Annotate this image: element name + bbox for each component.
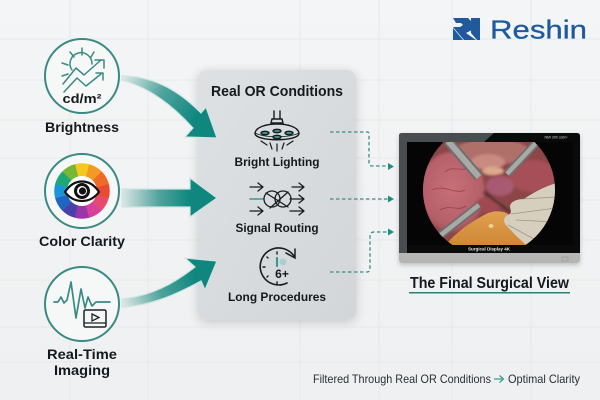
icon: real-time imaging	[45, 267, 119, 341]
display badge: NMI 300 cd/m²	[545, 136, 568, 140]
heading: The Final Surgical View: The Final Surgical View	[410, 275, 569, 292]
label: Bright Lighting: Bright Lighting	[234, 155, 320, 169]
logo: Reshin	[453, 14, 587, 44]
icon: clock 6+	[260, 248, 295, 285]
label: Brightness: Brightness	[45, 119, 119, 135]
surgical image	[423, 142, 555, 245]
arrow: color clarity to panel	[122, 178, 217, 217]
label: Color Clarity: Color Clarity	[39, 233, 125, 249]
arrow: dashed from signal routing to display	[330, 196, 394, 202]
icon: clock 6+: 6+	[275, 267, 289, 281]
label: Signal Routing: Signal Routing	[236, 221, 318, 235]
label: Real-Time Imaging	[47, 346, 117, 378]
icon: brightness	[45, 39, 119, 113]
label: Real-Time Imaging: Imaging	[54, 362, 110, 378]
logo wordmark: Reshin	[490, 14, 587, 44]
footer caption: Optimal Clarity	[508, 372, 580, 386]
icon: signal routing	[250, 183, 304, 215]
icon: surgical lamp	[255, 111, 299, 151]
arrow: brightness to panel	[122, 76, 217, 138]
surgical display monitor	[399, 120, 580, 263]
icon: color clarity eye wheel	[45, 154, 119, 228]
footer caption: Filtered Through Real OR Conditions	[313, 372, 491, 386]
arrow: real-time imaging to panel	[122, 258, 217, 307]
label: Long Procedures: Long Procedures	[228, 290, 326, 304]
panel heading: Real OR Conditions	[211, 83, 343, 100]
arrow: dashed from bright lighting to display	[330, 132, 394, 170]
icon: Reshin mark	[453, 18, 480, 40]
arrow: dashed from long procedures to display	[330, 228, 394, 272]
label: Real-Time Imaging: Real-Time	[47, 346, 117, 362]
display caption: Surgical Display 4K	[468, 246, 511, 252]
icon: brightness: cd/m²	[62, 92, 102, 106]
panel: Real OR Conditions	[198, 70, 356, 320]
icon: small arrow	[494, 376, 504, 382]
